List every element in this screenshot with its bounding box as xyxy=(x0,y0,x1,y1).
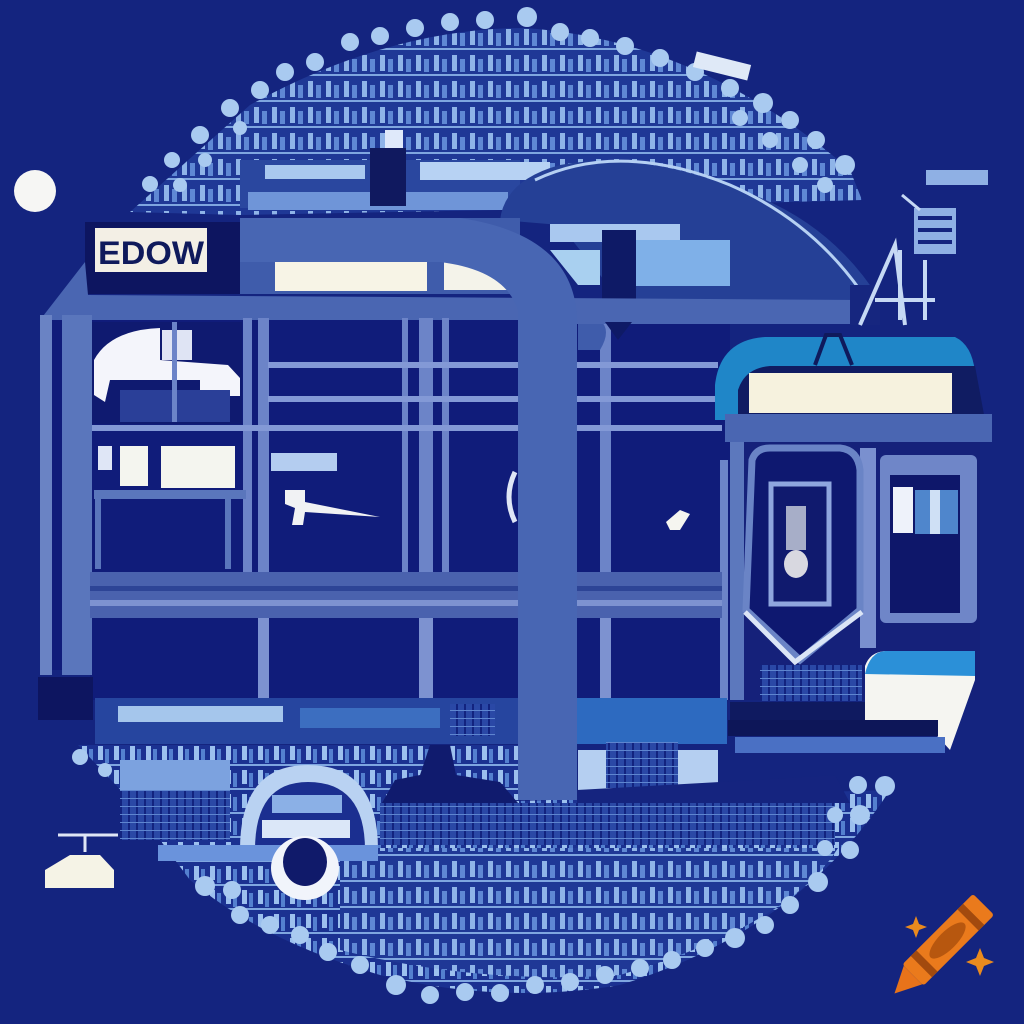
central arch column xyxy=(240,218,606,800)
station main hall dark background xyxy=(40,218,860,700)
top sign panel xyxy=(85,222,240,294)
sparkles xyxy=(905,916,927,938)
left windows with vehicle xyxy=(92,322,246,569)
moon xyxy=(14,170,56,212)
crayon logo xyxy=(884,894,994,1004)
white roof sign xyxy=(693,51,751,81)
platform band xyxy=(95,698,727,744)
crayon body xyxy=(884,894,994,1004)
lower perimeter dots xyxy=(72,749,895,1004)
grid verticals xyxy=(243,318,728,700)
upper windows xyxy=(275,252,427,291)
station main hall dark background: EDOW xyxy=(98,235,205,271)
left column xyxy=(40,315,52,675)
train front white box xyxy=(865,651,975,750)
roof beam xyxy=(40,262,860,320)
left lower building xyxy=(120,790,230,840)
train roof xyxy=(715,337,980,420)
lower column segment xyxy=(518,698,577,800)
station sign text xyxy=(95,228,207,272)
pantograph and small signal xyxy=(850,170,988,325)
small lamp icon xyxy=(45,835,118,888)
round portal xyxy=(240,765,378,850)
small hall details xyxy=(271,453,690,530)
upper dome perimeter dots xyxy=(142,7,855,193)
door chevron xyxy=(745,612,862,662)
grid horizontals xyxy=(92,362,722,431)
top roof rail xyxy=(577,302,867,340)
lower crowd bowl xyxy=(72,698,895,1004)
lower door grille xyxy=(760,665,862,701)
curved arch roof xyxy=(500,161,880,318)
train side window xyxy=(880,455,977,623)
station roof band xyxy=(240,130,550,210)
train body xyxy=(725,414,992,442)
lower hall verticals xyxy=(258,618,611,700)
silhouette row xyxy=(382,745,518,803)
train undercarriage xyxy=(730,702,865,724)
portal figure xyxy=(271,836,339,900)
lower beam xyxy=(90,572,722,618)
train door xyxy=(746,448,860,660)
door window xyxy=(771,484,829,604)
train xyxy=(715,335,992,753)
dark corner block xyxy=(38,677,93,720)
upper crowd dome xyxy=(130,7,862,215)
